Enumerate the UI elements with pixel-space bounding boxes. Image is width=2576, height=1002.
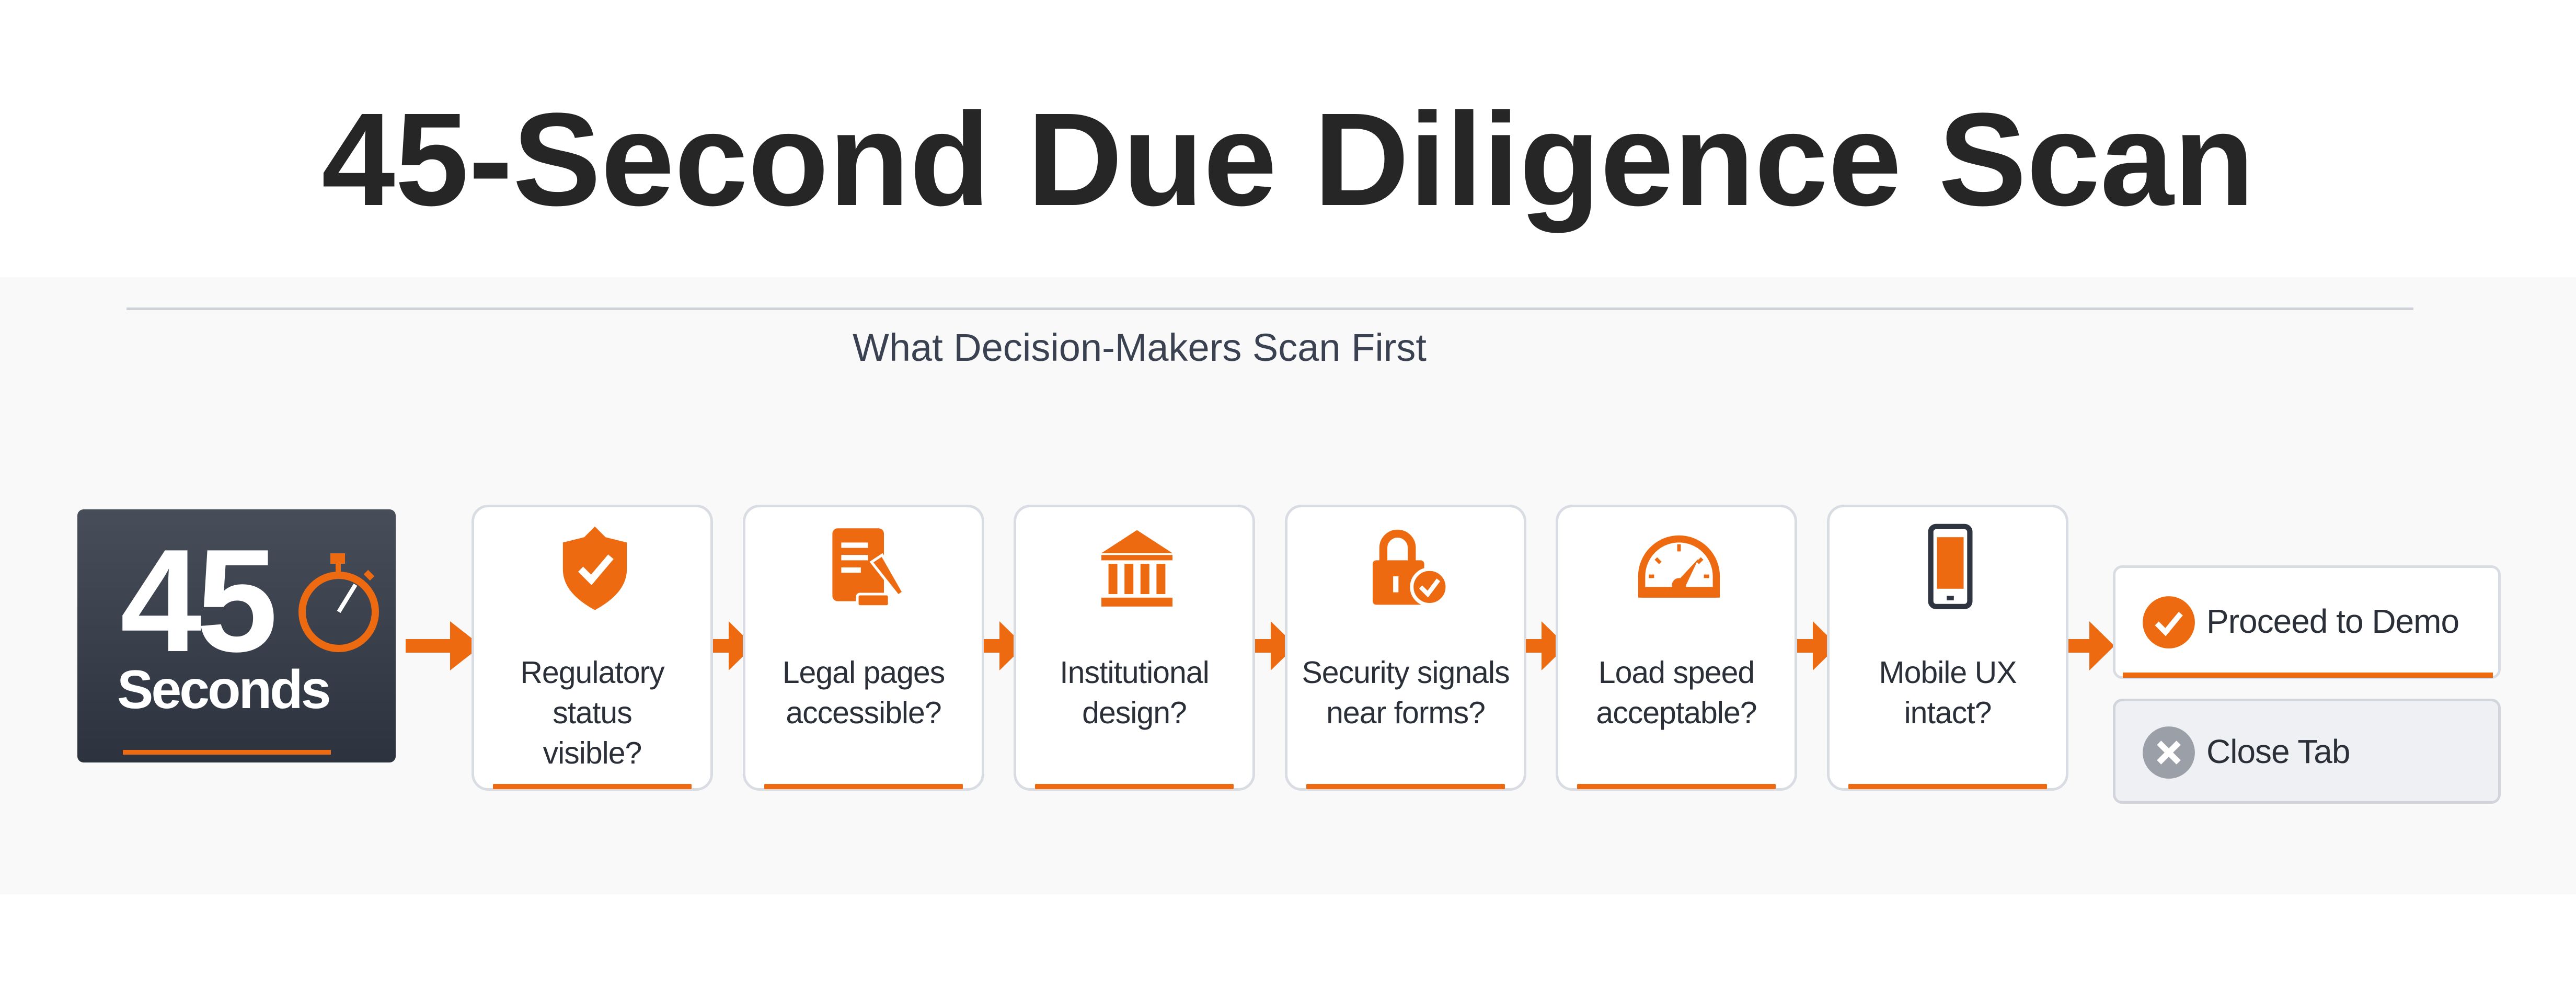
- card: regulatory: [472, 505, 713, 791]
- label: Proceed to Demo: [2206, 602, 2459, 640]
- text: [783, 655, 945, 730]
- icon: speedometer: [1638, 536, 1720, 598]
- text: Security signals: [1302, 655, 1510, 690]
- text: status: [553, 696, 632, 730]
- text: near forms?: [1326, 696, 1485, 730]
- text: Mobile UX: [1879, 655, 2017, 690]
- icon: check circle: [2143, 596, 2195, 648]
- text: Institutional: [1060, 655, 1209, 690]
- button: proceed to demo: [2113, 565, 2501, 679]
- text: visible?: [543, 736, 641, 770]
- arrow 2: [713, 621, 743, 670]
- text: [1302, 655, 1510, 730]
- arrow 1: [406, 621, 472, 670]
- icon: padlock check: [1373, 529, 1446, 605]
- card: institutional: [1014, 505, 1255, 791]
- text: Legal pages: [783, 655, 945, 690]
- icon: phone: [1928, 524, 1973, 609]
- text: [1596, 655, 1757, 730]
- text: [1879, 655, 2017, 730]
- panel: 45 seconds timer: [77, 509, 396, 762]
- arrow 4: [1255, 621, 1285, 670]
- big number 45: 45: [120, 519, 272, 682]
- label Seconds: Seconds: [117, 659, 329, 720]
- subtitle: What Decision-Makers Scan First: [853, 326, 1427, 369]
- text: Regulatory: [520, 655, 664, 690]
- card: load speed: [1556, 505, 1797, 791]
- icon: bank building: [1101, 530, 1172, 607]
- arrow 3: [984, 621, 1014, 670]
- label: Close Tab: [2206, 733, 2350, 770]
- text: acceptable?: [1596, 696, 1757, 730]
- background band: [0, 277, 2576, 894]
- card: security: [1285, 505, 1526, 791]
- button: close tab: [2113, 699, 2501, 804]
- arrow 6: [1797, 621, 1827, 670]
- icon: shield: [562, 526, 627, 610]
- arrow 5: [1526, 621, 1556, 670]
- text: [1060, 655, 1209, 730]
- card: mobile: [1827, 505, 2068, 791]
- icon: x circle: [2143, 726, 2195, 779]
- text: intact?: [1904, 696, 1991, 730]
- arrow 7: [2068, 621, 2113, 670]
- text: accessible?: [786, 696, 941, 730]
- icon: stopwatch: [298, 553, 379, 652]
- text: design?: [1082, 696, 1187, 730]
- text: [520, 655, 665, 770]
- title: 45-Second Due Diligence Scan: [321, 85, 2255, 233]
- card: legal: [743, 505, 984, 791]
- icon: document gavel: [832, 528, 902, 606]
- text: Load speed: [1598, 655, 1754, 690]
